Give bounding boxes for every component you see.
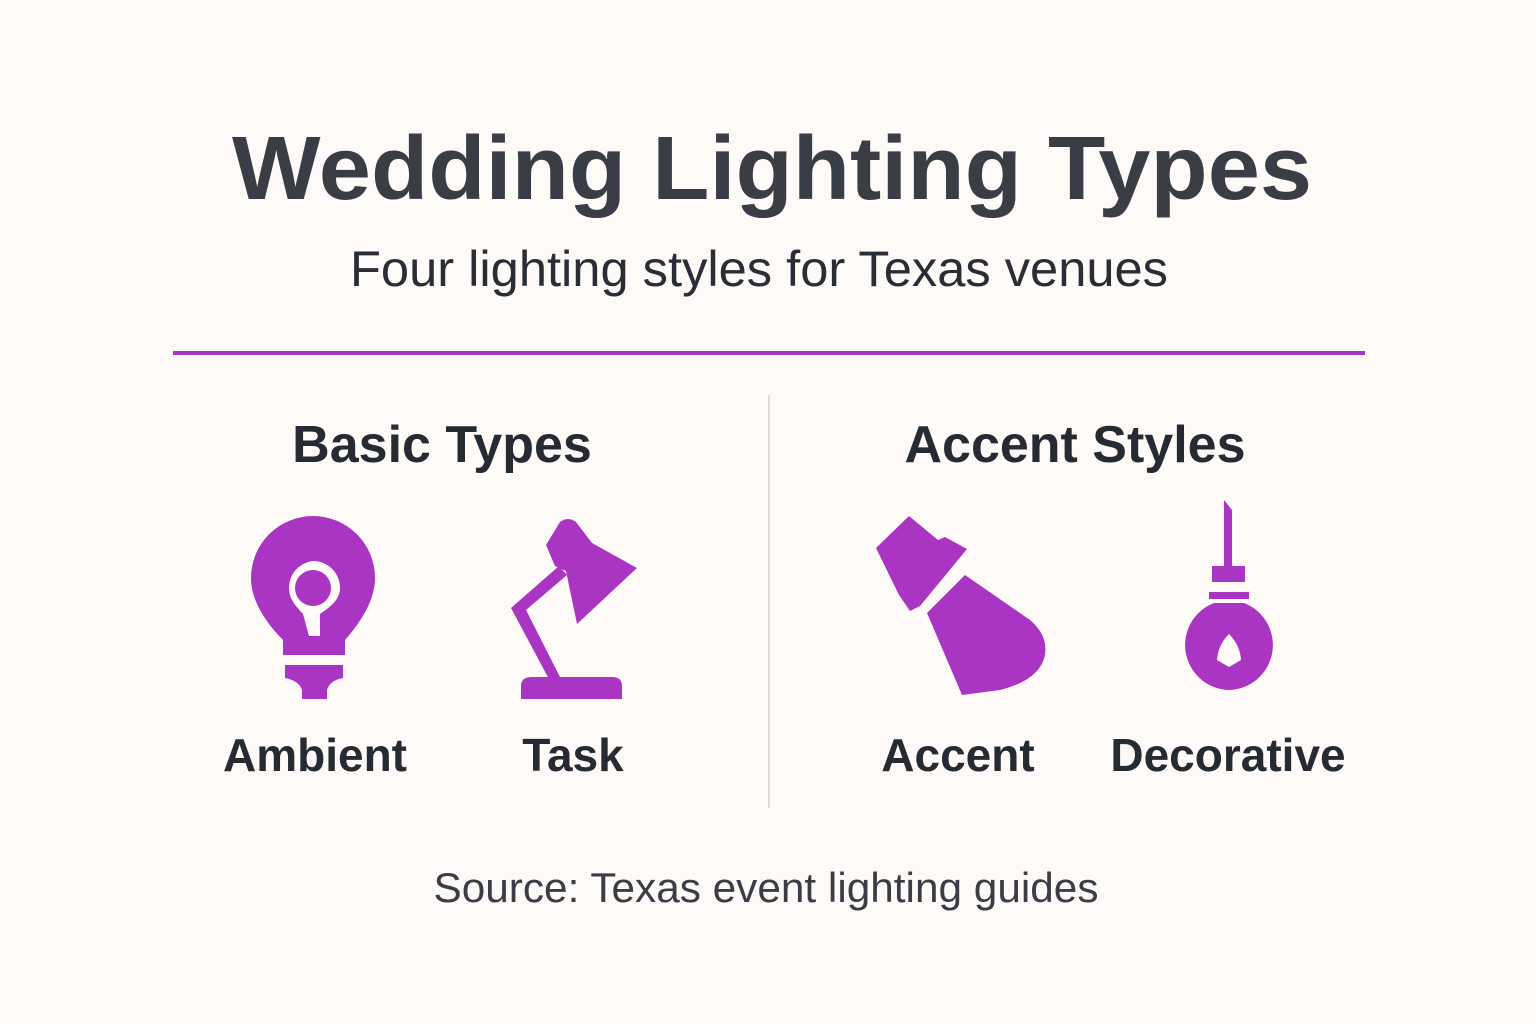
- source note: Source: Texas event lighting guides: [434, 864, 1098, 911]
- label: task: Task: [522, 729, 624, 781]
- title: Wedding Lighting Types: [232, 119, 1312, 219]
- icon: bulb: [251, 516, 375, 699]
- subtitle: Four lighting styles for Texas venues: [350, 241, 1168, 297]
- icon: decorative pendant: [1185, 500, 1273, 690]
- heading: accent styles: Accent Styles: [904, 416, 1246, 474]
- label: decorative: Decorative: [1110, 729, 1346, 781]
- icon: accent spotlight: [876, 516, 1045, 695]
- heading: basic types: Basic Types: [292, 416, 592, 474]
- label: ambient: Ambient: [223, 729, 407, 781]
- label: accent: Accent: [881, 729, 1035, 781]
- icon: desk lamp: [511, 519, 637, 699]
